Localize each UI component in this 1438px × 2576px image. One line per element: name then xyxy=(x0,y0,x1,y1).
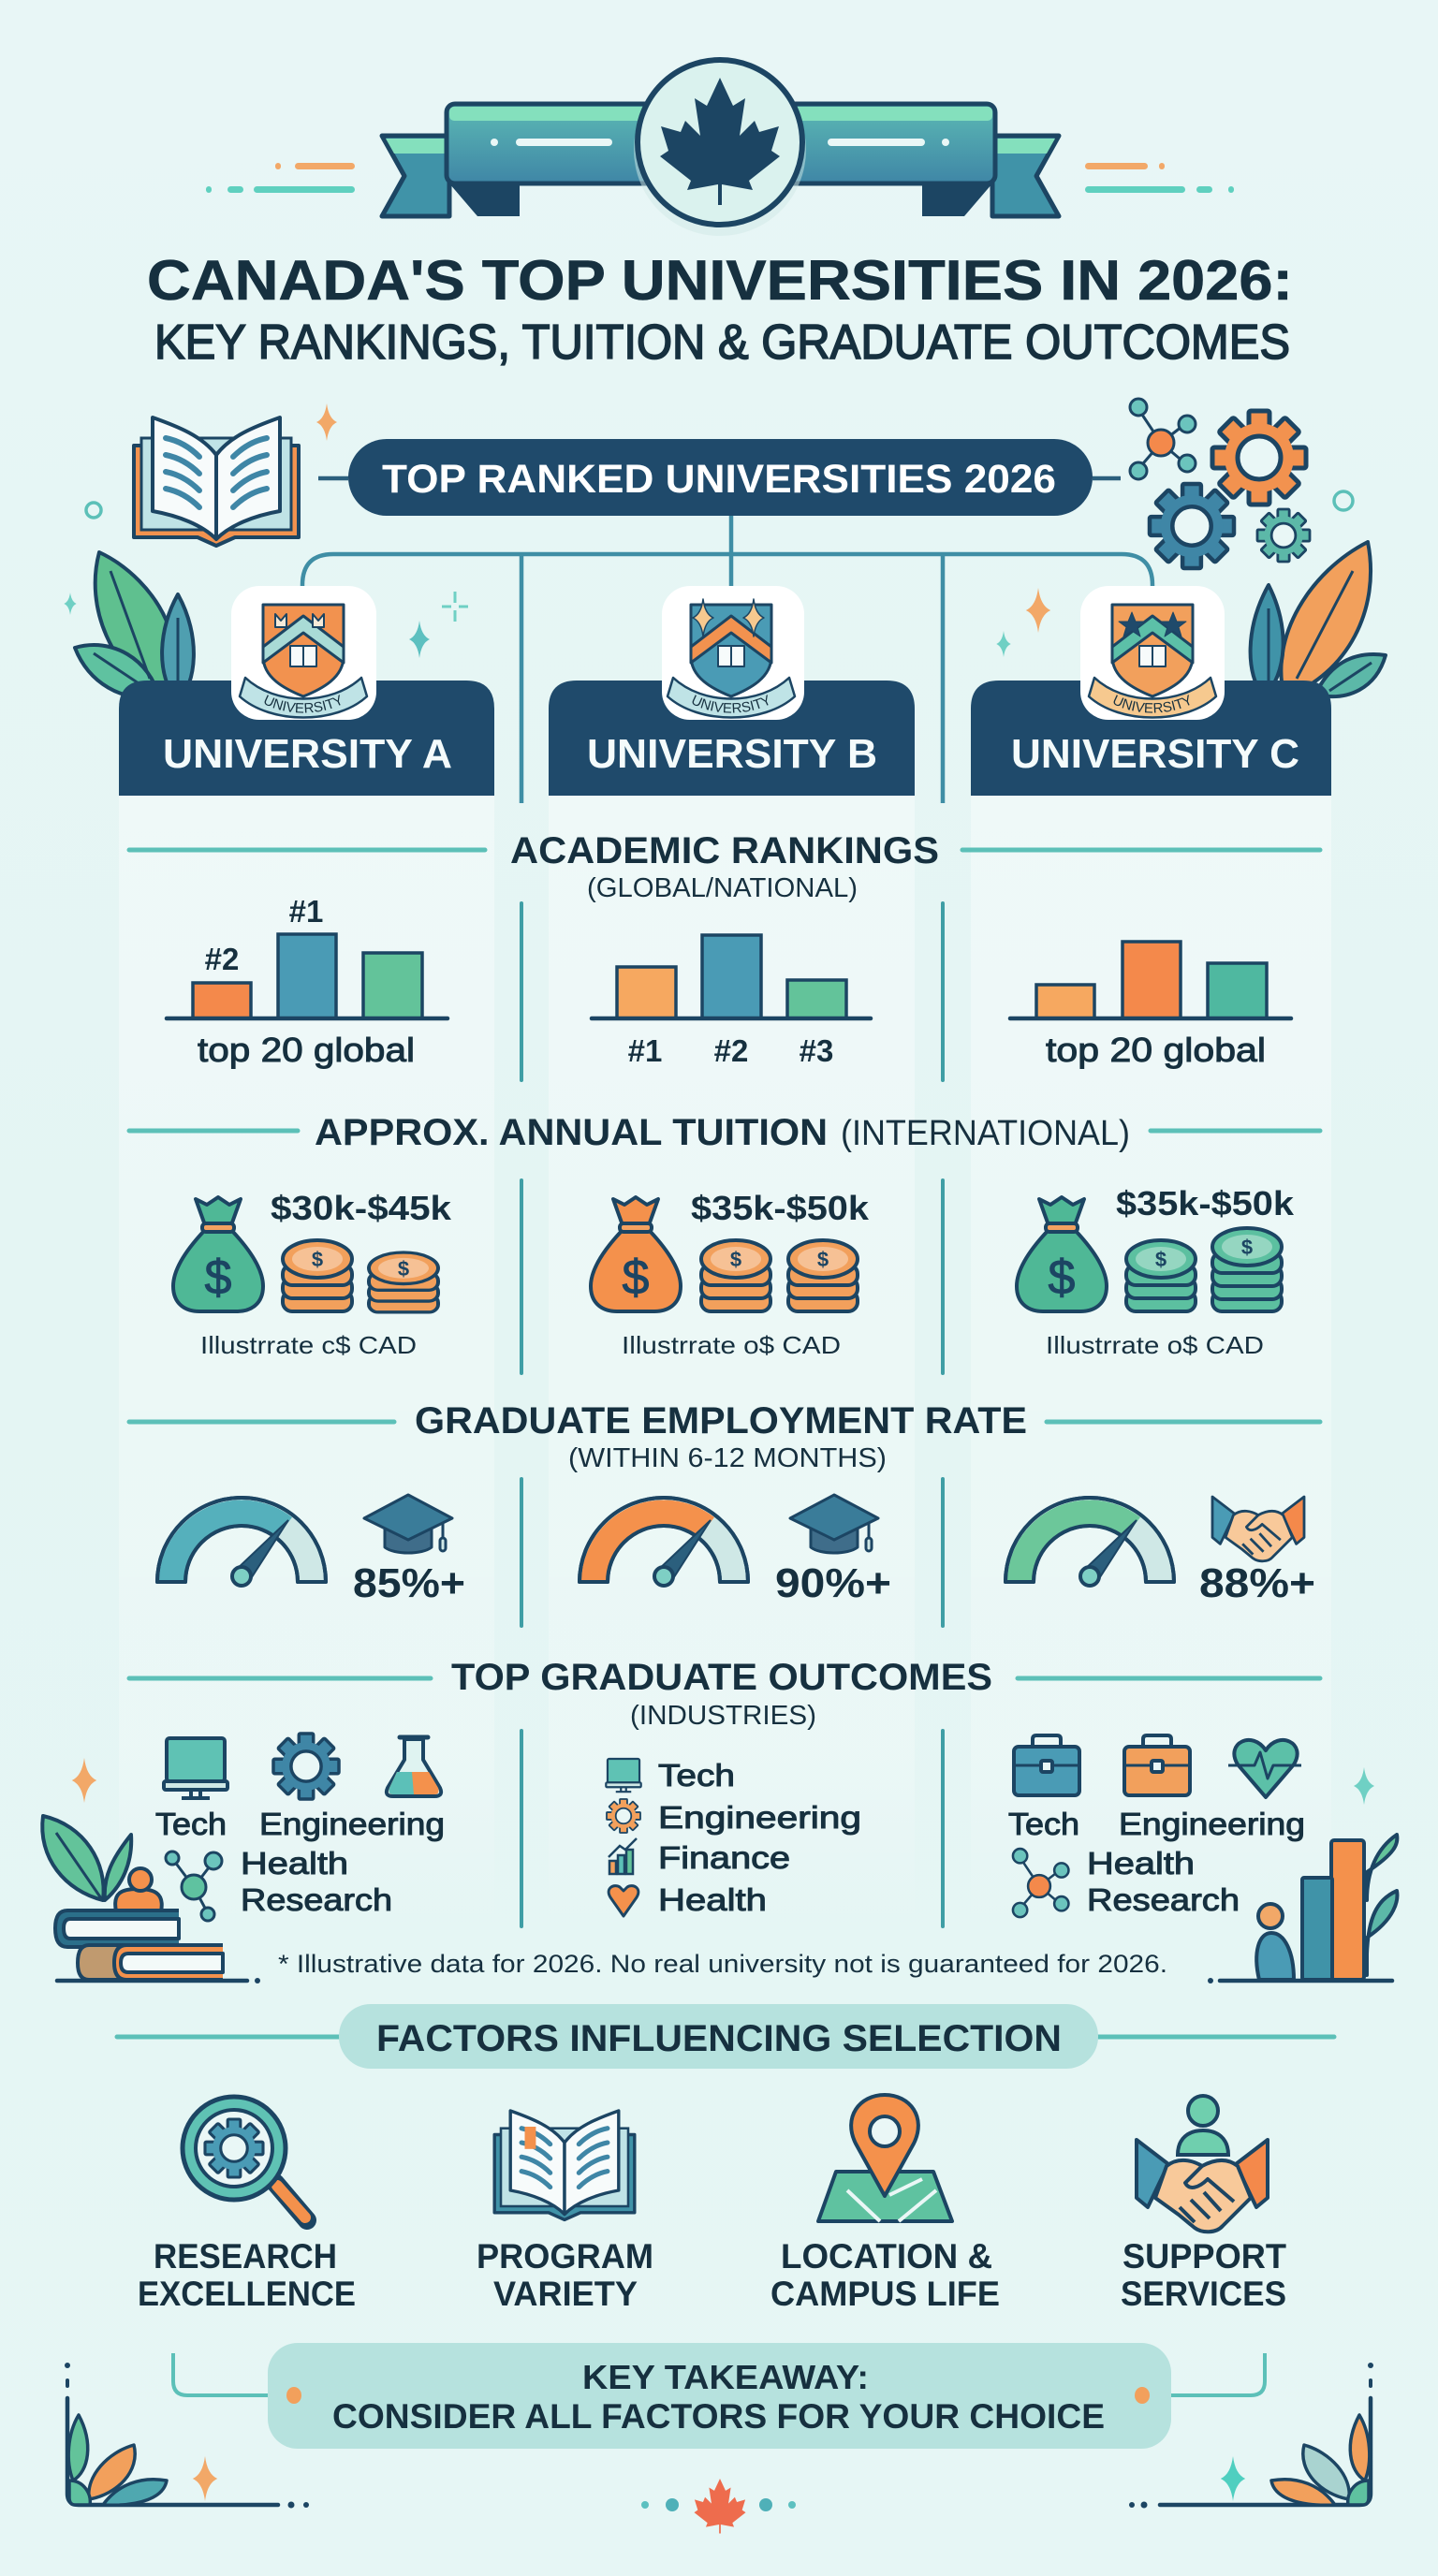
panel: University B header xyxy=(549,681,915,796)
icon: finance chart xyxy=(609,1838,637,1874)
icon: heart pulse xyxy=(1228,1740,1301,1797)
outcomes: University B: Finance xyxy=(658,1840,790,1875)
header banner with maple leaf xyxy=(382,60,1059,236)
tuition: University B: $ xyxy=(817,1248,829,1271)
tuition: University A xyxy=(173,1189,452,1359)
medallion xyxy=(638,60,802,225)
key takeaway callout: CONSIDER ALL FACTORS FOR YOUR CHOICE xyxy=(332,2397,1105,2436)
factor: support services: SUPPORT xyxy=(1123,2237,1286,2276)
icon: open book top left xyxy=(134,417,299,546)
tuition: University B: $35k-$50k xyxy=(691,1189,870,1227)
bar chart: University B: #1 xyxy=(628,1033,662,1068)
ring left xyxy=(86,503,101,518)
bar chart: University B: #3 xyxy=(800,1033,833,1068)
outcomes: University B: Health xyxy=(658,1882,767,1917)
bar chart: University A: #1 xyxy=(289,894,323,929)
outcomes: University A: Research xyxy=(241,1882,392,1917)
panel: University C header xyxy=(971,681,1331,796)
gauge: University C 88%: 88%+ xyxy=(1199,1560,1315,1606)
bottom maple leaf with dots xyxy=(641,2479,796,2533)
plant and books left xyxy=(42,1816,223,1980)
bar chart: University A: #2 xyxy=(205,942,239,976)
section heading: employment: GRADUATE EMPLOYMENT RATE xyxy=(415,1400,1027,1442)
tuition: University B xyxy=(591,1189,870,1359)
panel: University C header: UNIVERSITY C xyxy=(1011,731,1299,777)
footnote: * Illustrative data for 2026. No real university not is guaranteed for 2026. xyxy=(278,1950,1167,1978)
factor: location and campus life: CAMPUS LIFE xyxy=(770,2275,1000,2313)
outcomes: University A: Engineering xyxy=(259,1807,445,1841)
panel: University A header xyxy=(119,681,494,796)
decorative dashes right xyxy=(1085,163,1234,193)
corner ornament right xyxy=(1129,2363,1373,2509)
tuition: University C: $35k-$50k xyxy=(1116,1184,1295,1222)
section heading: outcomes xyxy=(129,1657,1320,1731)
small sparkles top xyxy=(64,588,1050,658)
section heading: academic rankings: ACADEMIC RANKINGS xyxy=(510,830,939,871)
section heading: academic rankings xyxy=(129,830,1320,903)
section heading: outcomes: (INDUSTRIES) xyxy=(630,1701,816,1731)
title: KEY RANKINGS, TUITION & GRADUATE OUTCOMES xyxy=(154,315,1290,370)
decorative dashes left xyxy=(206,163,355,193)
icon: flask xyxy=(387,1737,441,1796)
key takeaway callout xyxy=(173,2343,1265,2449)
section heading: tuition xyxy=(129,1112,1320,1153)
factor: location and campus life xyxy=(770,2095,1000,2313)
logo: University A crest: UNIVERSITY xyxy=(264,695,341,713)
gauge: University C 88% xyxy=(1005,1497,1315,1606)
outcomes: University C: Tech xyxy=(1008,1807,1079,1841)
logo: University C crest xyxy=(1080,586,1225,720)
tuition: University C: $ xyxy=(1155,1248,1167,1271)
section heading: outcomes: TOP GRADUATE OUTCOMES xyxy=(451,1657,992,1698)
ground line left xyxy=(57,1978,260,1983)
outcomes: University B xyxy=(606,1758,861,1917)
outcomes: University A: Tech xyxy=(155,1807,227,1841)
icon: book xyxy=(494,2111,635,2219)
icon: people handshake xyxy=(1137,2096,1268,2232)
panel: University B header: UNIVERSITY B xyxy=(587,731,877,777)
tuition: University B: $ xyxy=(623,1251,650,1305)
tuition: University A: $ xyxy=(205,1251,232,1305)
maple leaf xyxy=(660,78,780,205)
icon: map pin xyxy=(818,2095,952,2221)
section heading: tuition: APPROX. ANNUAL TUITION xyxy=(315,1112,828,1153)
bar chart: University A xyxy=(167,894,448,1069)
bar chart: University C: top 20 global xyxy=(1046,1031,1266,1069)
icon: magnifier xyxy=(183,2097,307,2220)
section heading: tuition: (INTERNATIONAL) xyxy=(841,1114,1130,1153)
outcomes: University A xyxy=(155,1734,445,1917)
pill: top ranked universities: TOP RANKED UNIVERSITIES 2026 xyxy=(382,457,1056,502)
bar chart: University C xyxy=(1010,942,1291,1069)
outcomes: University A: Health xyxy=(241,1846,348,1881)
corner ornament left xyxy=(65,2363,309,2509)
title xyxy=(147,249,1293,370)
icon: molecule left xyxy=(166,1852,222,1921)
section heading: academic rankings: (GLOBAL/NATIONAL) xyxy=(587,873,858,903)
icon: molecule and gears xyxy=(1130,399,1353,568)
banner body xyxy=(447,104,995,183)
outcomes: University B: Tech xyxy=(658,1758,735,1793)
gauge: University B 90% xyxy=(580,1495,891,1606)
section vertical dividers xyxy=(521,903,943,1926)
section pill: factors xyxy=(117,2004,1334,2069)
tuition: University C: $ xyxy=(1241,1236,1253,1259)
logo: University B crest xyxy=(662,586,804,720)
gauge: University A 85%: 85%+ xyxy=(353,1560,465,1606)
logo: University A crest xyxy=(231,586,376,720)
column backgrounds xyxy=(119,796,1331,1928)
outcomes: University C: Engineering xyxy=(1119,1807,1305,1841)
logo: University B crest: UNIVERSITY xyxy=(693,695,769,713)
person and books right xyxy=(1256,1835,1397,1980)
gauge: University A 85% xyxy=(157,1495,465,1606)
section heading: employment xyxy=(129,1400,1320,1473)
tuition: University A: $ xyxy=(398,1257,409,1281)
banner left tail xyxy=(382,136,449,216)
gauge: University B 90%: 90%+ xyxy=(775,1560,891,1606)
factor: research excellence: RESEARCH xyxy=(154,2237,337,2276)
bar chart: University B: #2 xyxy=(714,1033,748,1068)
outcomes: University C xyxy=(1008,1735,1305,1917)
tuition: University A: $ xyxy=(312,1248,323,1271)
factor: program variety xyxy=(477,2111,653,2313)
outcomes: University B: Engineering xyxy=(658,1800,861,1835)
outcomes: University C: Health xyxy=(1087,1846,1195,1881)
banner right tail xyxy=(992,136,1059,216)
factor: program variety: PROGRAM xyxy=(477,2237,653,2276)
panel: University A header: UNIVERSITY A xyxy=(163,731,452,777)
title: CANADA'S TOP UNIVERSITIES IN 2026: xyxy=(147,249,1293,312)
section pill: factors: FACTORS INFLUENCING SELECTION xyxy=(376,2018,1062,2059)
factor: location and campus life: LOCATION & xyxy=(781,2237,992,2276)
outcomes: University C: Research xyxy=(1087,1882,1240,1917)
tuition: University C: Illustrrate o$ CAD xyxy=(1046,1331,1264,1359)
ground line right xyxy=(1208,1978,1392,1983)
tuition: University A: $30k-$45k xyxy=(271,1189,452,1227)
tuition: University A: Illustrrate c$ CAD xyxy=(200,1331,417,1359)
leaves left xyxy=(75,552,194,702)
tuition: University B: Illustrrate o$ CAD xyxy=(622,1331,841,1359)
bar chart: University B xyxy=(592,935,871,1068)
tuition: University B: $ xyxy=(730,1248,741,1271)
leaves right xyxy=(1251,542,1386,697)
sparkle orange xyxy=(316,403,337,441)
factor: support services: SERVICES xyxy=(1121,2275,1286,2313)
icon: heart xyxy=(609,1886,638,1916)
bar chart: University A: top 20 global xyxy=(198,1031,415,1069)
tuition: University C xyxy=(1017,1184,1295,1359)
factor: research excellence: EXCELLENCE xyxy=(138,2275,356,2313)
factor: support services xyxy=(1121,2096,1286,2313)
logo: University C crest: UNIVERSITY xyxy=(1114,695,1190,713)
section heading: employment: (WITHIN 6-12 MONTHS) xyxy=(568,1443,887,1473)
tuition: University C: $ xyxy=(1049,1251,1076,1305)
sparkles side xyxy=(72,1758,1374,1805)
pill: top ranked universities xyxy=(348,439,1093,516)
factor: research excellence xyxy=(138,2097,356,2313)
connector lines xyxy=(302,478,1152,803)
factor: program variety: VARIETY xyxy=(493,2275,638,2313)
key takeaway callout: KEY TAKEAWAY: xyxy=(582,2358,869,2396)
